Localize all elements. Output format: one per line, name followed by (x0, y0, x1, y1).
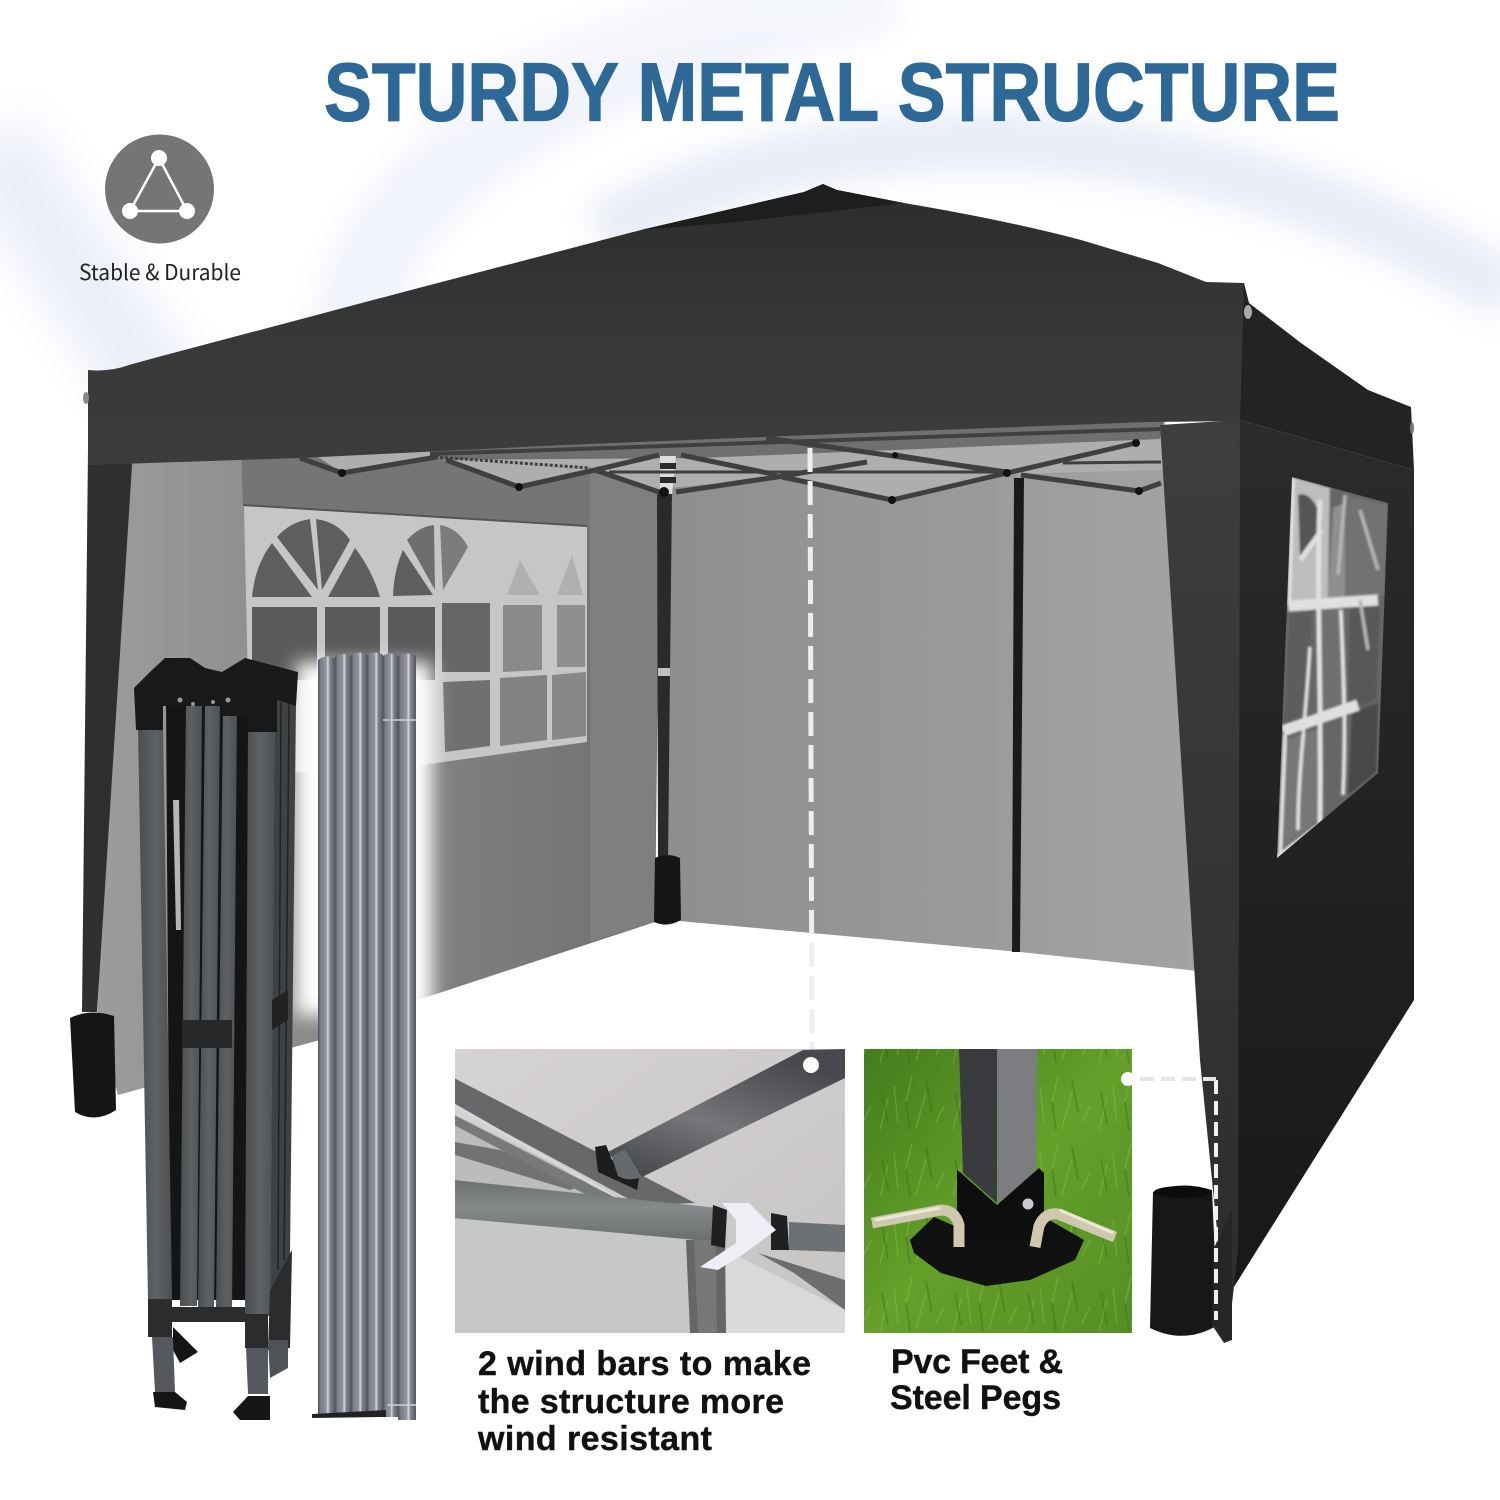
callout dot: wind bars (803, 1057, 819, 1073)
tent: roof underside (300, 405, 1165, 500)
tent: left wall (97, 445, 660, 1095)
sandbag: left (70, 1012, 116, 1118)
caption: wind bars: the structure more (478, 1383, 784, 1421)
sandbag: right (1150, 1185, 1232, 1343)
caption: wind bars: 2 wind bars to make (478, 1345, 811, 1383)
callout connector: feet (1121, 1072, 1216, 1320)
poles halo (296, 662, 432, 1015)
tent: right wall (1215, 420, 1414, 1340)
caption: wind bars: wind resistant (477, 1420, 712, 1458)
icon: triangle (105, 134, 214, 244)
inset photo: feet and pegs (864, 1048, 1132, 1333)
badge label: Stable & Durable (79, 256, 241, 287)
inset photo: wind bars (454, 1049, 845, 1333)
frame tubes (138, 706, 275, 1316)
badge: stable and durable (79, 134, 241, 287)
caption: feet and pegs: Steel Pegs (890, 1379, 1061, 1417)
title: STURDY METAL STRUCTURE (324, 46, 1340, 138)
truss joints (338, 439, 1143, 504)
frame feet (268, 1250, 292, 1350)
caption: feet and pegs: Pvc Feet & (891, 1343, 1063, 1381)
tent (70, 184, 1414, 1343)
folded frame (134, 658, 298, 1420)
poles bundle (312, 652, 416, 1420)
tent: left corner flap (82, 450, 133, 1012)
frame middle clamps (182, 1020, 232, 1048)
window: left wall (243, 505, 587, 775)
tent: corner post (654, 456, 681, 925)
tent: canopy (83, 184, 1414, 470)
callout line: wind bars (810, 448, 812, 1060)
frame: roof trusses (300, 429, 1161, 500)
frame top brackets (134, 658, 298, 732)
window: right wall (1277, 477, 1388, 858)
tent: back wall (668, 470, 1198, 971)
